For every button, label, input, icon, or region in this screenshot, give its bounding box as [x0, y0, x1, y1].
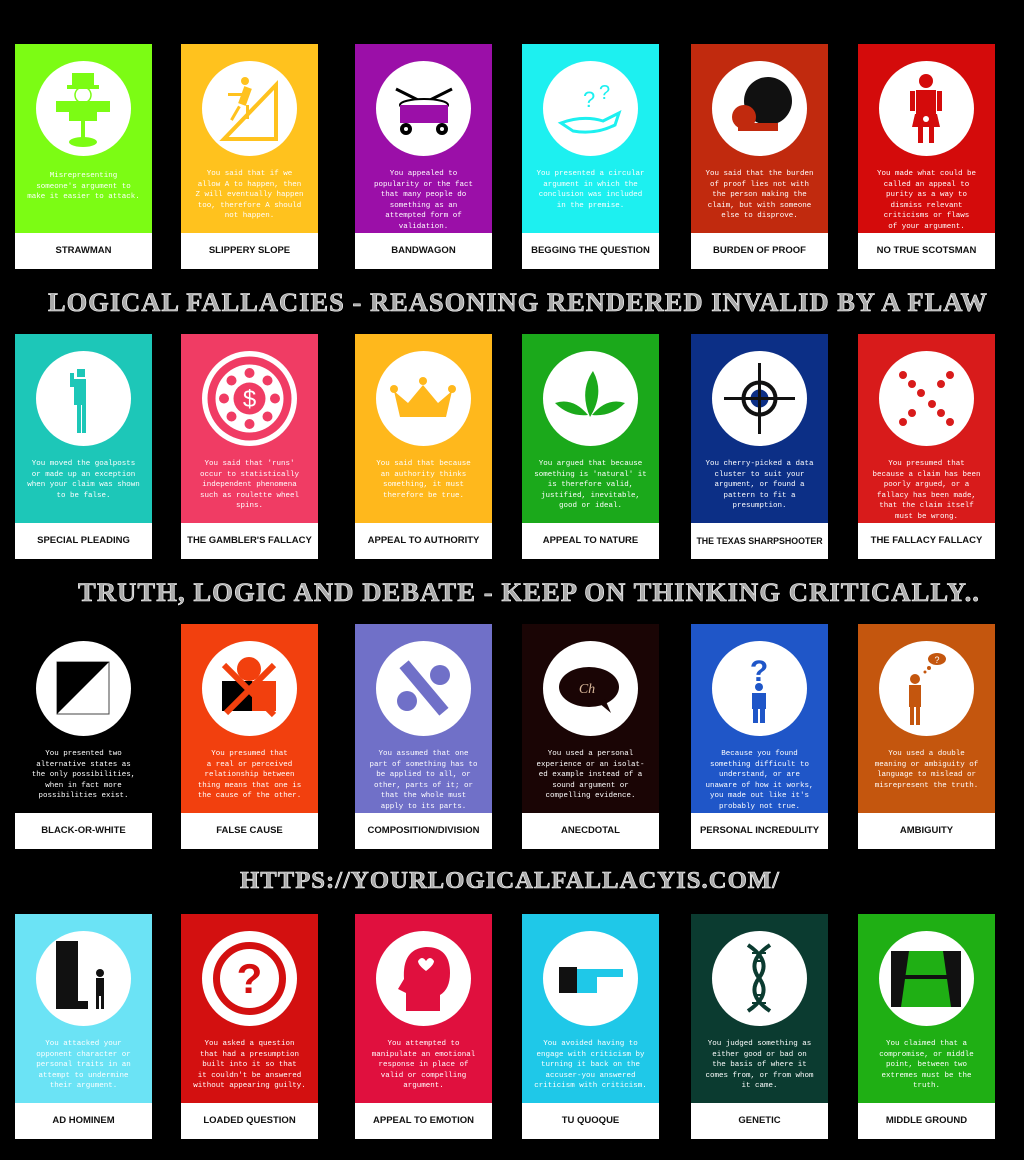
text — [862, 1039, 991, 1092]
label: BLACK-OR-WHITE — [41, 825, 126, 836]
text: You avoided having to — [543, 1040, 638, 1048]
text: someone's argument to — [36, 182, 131, 190]
label: STRAWMAN — [56, 245, 111, 256]
icon: big leg and small man — [36, 931, 131, 1026]
card: personal incredulity — [691, 624, 828, 849]
text: You said that because — [376, 460, 471, 468]
text: argument in which the — [543, 180, 638, 188]
icon: crosshair — [712, 351, 807, 446]
text: that had a presumption — [200, 1050, 299, 1058]
icon: person with question — [712, 641, 807, 736]
text: without appearing guilty. — [193, 1082, 306, 1090]
text: misrepresent the truth. — [875, 782, 978, 790]
card: texas sharpshooter — [691, 334, 828, 559]
text: meaning or ambiguity of — [875, 760, 978, 768]
icon: speech bubble: Ch — [579, 682, 595, 697]
icon: thinking person: ? — [934, 655, 940, 665]
label: LOADED QUESTION — [203, 1115, 296, 1126]
label: COMPOSITION/DIVISION — [368, 825, 479, 836]
card: no true scotsman — [858, 44, 995, 269]
icon: chip: $ — [243, 386, 256, 413]
text: when your claim was shown — [27, 481, 140, 489]
label — [858, 1103, 995, 1139]
text: You assumed that one — [378, 750, 468, 758]
text: You presented a circular — [536, 170, 645, 178]
text: attempted form of — [385, 212, 462, 220]
text: it came. — [741, 1082, 778, 1090]
label: APPEAL TO NATURE — [543, 535, 638, 546]
icon: dotted x — [879, 351, 974, 446]
text: You claimed that a — [886, 1040, 967, 1048]
text: You used a double — [888, 750, 965, 758]
label: THE TEXAS SHARPSHOOTER — [696, 536, 823, 546]
card: false cause — [181, 624, 318, 849]
label — [522, 523, 659, 559]
label — [691, 1103, 828, 1139]
text: in the premise. — [557, 202, 624, 210]
text: engage with criticism by — [536, 1050, 645, 1058]
icon: hand with question marks: ? — [583, 87, 595, 112]
text: something is 'natural' it — [534, 470, 647, 478]
text: You judged something as — [708, 1040, 811, 1048]
label — [691, 233, 828, 269]
text: it couldn't be answered — [198, 1072, 301, 1080]
label — [15, 523, 152, 559]
text: something, it must — [383, 481, 464, 489]
text: called an appeal to — [884, 180, 969, 188]
text: therefore be true. — [383, 492, 464, 500]
text: truth. — [913, 1082, 940, 1090]
text: You said that 'runs' — [204, 460, 294, 468]
label: SPECIAL PLEADING — [37, 535, 130, 546]
icon: figure — [36, 351, 131, 446]
text: a real or perceived — [207, 760, 292, 768]
text: response in place of — [378, 1061, 468, 1069]
text: too, therefore A should — [198, 202, 301, 210]
card: strawman — [15, 44, 152, 269]
text: to be false. — [56, 492, 110, 500]
icon: circular question: ? — [237, 955, 262, 1002]
label — [691, 523, 828, 559]
text: spins. — [236, 502, 263, 510]
label: THE GAMBLER'S FALLACY — [187, 535, 312, 546]
text: You used a personal — [548, 750, 633, 758]
text: compromise, or middle — [879, 1050, 974, 1058]
icon: scarecrow — [36, 61, 131, 156]
icon: head with heart — [376, 931, 471, 1026]
text: thing means that one is — [198, 782, 301, 790]
label — [355, 813, 492, 849]
text: You made what could be — [877, 170, 976, 178]
icon: crossed figure — [202, 641, 297, 736]
text: the basis of where it — [712, 1061, 807, 1069]
text: probably not true. — [719, 802, 800, 810]
text — [374, 170, 473, 230]
card: loaded question — [181, 914, 318, 1139]
label: THE FALLACY FALLACY — [871, 535, 982, 546]
text — [198, 750, 301, 800]
label: FALSE CAUSE — [216, 825, 283, 836]
label — [15, 813, 152, 849]
label — [181, 233, 318, 269]
text: language to mislead or — [877, 771, 976, 779]
text: independent phenomena — [202, 481, 297, 489]
text: possibilities exist. — [38, 792, 128, 800]
text — [695, 1039, 824, 1092]
icon: chip — [202, 351, 297, 446]
text: valid or compelling — [381, 1072, 466, 1080]
label: MIDDLE GROUND — [886, 1115, 967, 1126]
card: middle ground — [858, 914, 995, 1139]
card: burden of proof — [691, 44, 828, 269]
text: presumption. — [732, 502, 786, 510]
text: justified, inevitable, — [541, 492, 640, 500]
text: purity as a way to — [886, 191, 967, 199]
card: slippery slope — [181, 44, 318, 269]
label — [691, 813, 828, 849]
text — [705, 750, 814, 810]
card: ad hominem — [15, 914, 152, 1139]
text: criticisms or flaws — [884, 212, 969, 220]
label: BURDEN OF PROOF — [713, 245, 806, 256]
text: You presumed that — [211, 750, 288, 758]
text: dismiss relevant — [890, 202, 962, 210]
text — [376, 460, 471, 500]
text: such as roulette wheel — [200, 492, 299, 500]
text: Misrepresenting — [50, 172, 117, 180]
text: ed example instead of a — [539, 771, 642, 779]
card: fallacy fallacy — [858, 334, 995, 559]
label: AD HOMINEM — [52, 1115, 115, 1126]
text: sound argument or — [552, 782, 629, 790]
text: You attempted to — [387, 1040, 460, 1048]
card: appeal to emotion — [355, 914, 492, 1139]
icon: person with question: ? — [750, 655, 768, 688]
card: bandwagon — [355, 44, 492, 269]
card: anecdotal — [522, 624, 659, 849]
icon: leaves — [543, 351, 638, 446]
icon: pointing hand — [543, 931, 638, 1026]
text — [526, 1039, 655, 1092]
text: be applied to all, or — [376, 771, 471, 779]
icon: hand with question marks: ? — [599, 82, 610, 104]
text: something difficult to — [710, 760, 809, 768]
text: You moved the goalposts — [32, 460, 135, 468]
text: comes from, or from whom — [705, 1072, 814, 1080]
text: built into it so that — [202, 1061, 297, 1069]
icon: thinking person — [879, 641, 974, 736]
text: either good or bad on — [712, 1050, 807, 1058]
icon: hand with question marks — [543, 61, 638, 156]
text: unaware of how it works, — [705, 782, 814, 790]
label — [15, 233, 152, 269]
text: validation. — [399, 222, 448, 230]
text: not happen. — [225, 212, 274, 220]
label — [355, 1103, 492, 1139]
text: the cause of the other. — [198, 792, 301, 800]
text: understand, or are — [719, 771, 800, 779]
label: ANECDOTAL — [561, 825, 620, 836]
text: because a claim has been — [872, 470, 981, 478]
label: SLIPPERY SLOPE — [209, 245, 290, 256]
text — [27, 172, 140, 201]
text — [536, 750, 645, 800]
text: occur to statistically — [200, 470, 299, 478]
label — [522, 1103, 659, 1139]
text: is therefore valid, — [548, 481, 633, 489]
icon: person under burden — [712, 61, 807, 156]
text — [705, 170, 814, 220]
card: tu quoque — [522, 914, 659, 1139]
text: extremes must be the — [881, 1072, 972, 1080]
text: fallacy has been made, — [877, 492, 976, 500]
label — [522, 233, 659, 269]
label: AMBIGUITY — [900, 825, 953, 836]
text: good or ideal. — [559, 502, 622, 510]
text: experience or an isolat- — [536, 760, 645, 768]
card: composition/division — [355, 624, 492, 849]
text: or made up an exception — [32, 470, 135, 478]
text: of proof lies not with — [710, 180, 809, 188]
text: poorly argued, or a — [884, 481, 969, 489]
text — [359, 1039, 488, 1092]
card: appeal to nature — [522, 334, 659, 559]
text: that the claim itself — [879, 502, 974, 510]
icon: dna — [712, 931, 807, 1026]
banner: url: HTTPS://YOURLOGICALFALLACYIS.COM/ — [240, 868, 780, 894]
text: their argument. — [50, 1082, 117, 1090]
text: attempt to undermine — [38, 1072, 128, 1080]
text: popularity or the fact — [374, 180, 473, 188]
text: You asked a question — [204, 1040, 294, 1048]
text: the only possibilities, — [32, 771, 135, 779]
text: opponent character or — [36, 1050, 131, 1058]
text — [369, 750, 478, 810]
text: apply to its parts. — [381, 802, 466, 810]
label — [181, 813, 318, 849]
card: special pleading — [15, 334, 152, 559]
label — [181, 1103, 318, 1139]
text: the person making the — [712, 191, 807, 199]
label — [355, 233, 492, 269]
icon: scotsman — [879, 61, 974, 156]
text — [877, 170, 976, 230]
text: compelling evidence. — [545, 792, 636, 800]
icon: drum — [376, 61, 471, 156]
text: accuser-you answered — [545, 1072, 636, 1080]
label — [15, 1103, 152, 1139]
text: else to disprove. — [721, 212, 798, 220]
text: allow A to happen, then — [198, 180, 301, 188]
text: relationship between — [204, 771, 294, 779]
text: You cherry-picked a data — [705, 460, 814, 468]
text — [27, 460, 140, 500]
text: of your argument. — [888, 222, 965, 230]
text: point, between two — [886, 1061, 967, 1069]
text: that the whole must — [381, 792, 466, 800]
icon: half square — [36, 641, 131, 736]
text — [19, 1039, 148, 1092]
card: appeal to authority — [355, 334, 492, 559]
icon: road — [879, 931, 974, 1026]
label: GENETIC — [738, 1115, 781, 1126]
icon: speech bubble — [543, 641, 638, 736]
text — [200, 460, 299, 510]
text: You attacked your — [45, 1040, 122, 1048]
label: BEGGING THE QUESTION — [531, 245, 650, 256]
card: gambler's fallacy — [181, 334, 318, 559]
text — [534, 460, 647, 510]
text — [195, 170, 304, 220]
text: You appealed to — [390, 170, 457, 178]
text: You said that if we — [207, 170, 292, 178]
label — [858, 523, 995, 559]
label: BANDWAGON — [391, 245, 456, 256]
text: alternative states as — [36, 760, 131, 768]
label — [522, 813, 659, 849]
card: ambiguity — [858, 624, 995, 849]
text: turning it back on the — [541, 1061, 640, 1069]
text — [536, 170, 645, 210]
text: argument, or found a — [714, 481, 804, 489]
label — [858, 233, 995, 269]
text: You presumed that — [888, 460, 965, 468]
label — [858, 813, 995, 849]
text: pattern to fit a — [723, 492, 796, 500]
label — [181, 523, 318, 559]
text — [875, 750, 978, 790]
text: you made out like it's — [710, 792, 809, 800]
text: manipulate an emotional — [372, 1050, 475, 1058]
text: part of something has to — [369, 760, 478, 768]
text: You argued that because — [539, 460, 642, 468]
text: You said that the burden — [705, 170, 814, 178]
text: make it easier to attack. — [27, 193, 140, 201]
icon: slope — [202, 61, 297, 156]
text: when in fact more — [45, 782, 122, 790]
text: personal traits in an — [36, 1061, 131, 1069]
label: APPEAL TO EMOTION — [373, 1115, 474, 1126]
label: APPEAL TO AUTHORITY — [368, 535, 479, 546]
text: other, parts of it; or — [374, 782, 473, 790]
text: You presented two — [45, 750, 122, 758]
text: cluster to suit your — [714, 470, 804, 478]
label: TU QUOQUE — [562, 1115, 619, 1126]
text: claim, but with someone — [708, 202, 811, 210]
text: that many people do — [381, 191, 466, 199]
text — [705, 460, 814, 510]
text — [872, 460, 981, 520]
icon: circular question — [202, 931, 297, 1026]
text — [32, 750, 135, 800]
text — [185, 1039, 314, 1092]
text: must be wrong. — [895, 512, 958, 520]
label — [355, 523, 492, 559]
card: begging the question — [522, 44, 659, 269]
text: an authority thinks — [381, 470, 466, 478]
card: genetic — [691, 914, 828, 1139]
text: conclusion was included — [539, 191, 642, 199]
label: NO TRUE SCOTSMAN — [877, 245, 976, 256]
icon: crown — [376, 351, 471, 446]
text: criticism with criticism. — [534, 1082, 647, 1090]
card: black-or-white — [15, 641, 152, 849]
text: Z will eventually happen — [195, 191, 304, 199]
icon: percent — [376, 641, 471, 736]
text: something as an — [390, 202, 457, 210]
label: PERSONAL INCREDULITY — [700, 825, 819, 836]
text: Because you found — [721, 750, 798, 758]
text: argument. — [403, 1082, 444, 1090]
